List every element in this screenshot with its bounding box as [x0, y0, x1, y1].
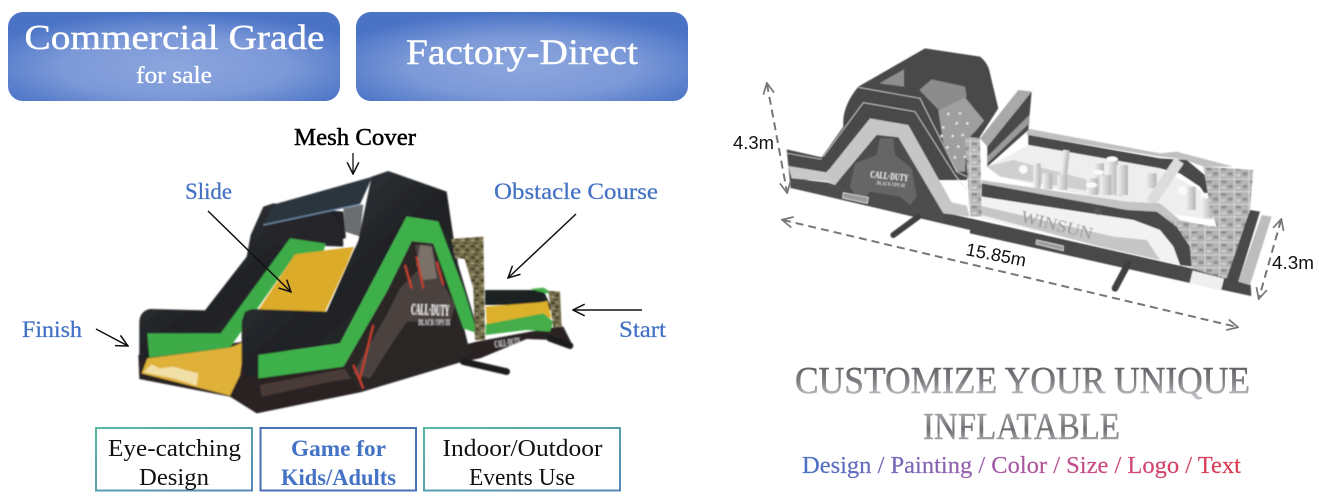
arrow: Start: [573, 309, 642, 311]
front black tube: [242, 171, 478, 378]
camo side block: [1213, 170, 1253, 278]
feature box: Game for Kids/Adults: Kids/Adults: [281, 465, 396, 490]
front gray band: [982, 206, 1160, 260]
dimension arrow: length: [783, 220, 1237, 327]
front green band: [258, 217, 477, 378]
label: Mesh Cover: Mesh Cover: [294, 125, 416, 151]
arrow: Obstacle Course: [508, 214, 576, 278]
registered mark: ®: [1094, 207, 1102, 218]
ground legs: [463, 338, 570, 372]
base tube: [138, 327, 573, 413]
camo pillar: [965, 137, 982, 217]
wall grips: [940, 112, 969, 159]
small sign: [843, 193, 868, 203]
light slide rim: [827, 118, 969, 217]
front white face: [982, 197, 1180, 265]
soldier panel: [343, 241, 470, 392]
feature box: Eye-catching Design: Eye-catching: [108, 436, 241, 462]
feature box: Indoor/Outdoor Events Use: Events Use: [469, 465, 575, 491]
feature box: Game for Kids/Adults: Game for: [291, 436, 386, 461]
rear wall dark band: [1028, 135, 1220, 208]
panel logo: [870, 169, 909, 189]
white gap: [343, 236, 358, 248]
mesh cover: [263, 172, 388, 224]
diagonal obstacle: [1151, 161, 1179, 203]
back arch inner: [263, 212, 343, 247]
badge: Factory-Direct: Factory-Direct: [406, 32, 638, 72]
base highlight: [260, 362, 397, 397]
climbing wall: [938, 97, 984, 172]
badge: Commercial Grade for sale: Commercial Grade: [24, 18, 324, 57]
back green band: [147, 238, 326, 358]
soldier panel: [791, 135, 943, 222]
base dark: [787, 149, 1260, 296]
front dark rail: [982, 183, 1193, 267]
dimension label: width: 4.3m: [1272, 253, 1314, 273]
badge: Commercial Grade for sale: for sale: [136, 63, 212, 89]
obstacle caps: [1019, 156, 1213, 198]
watermark: WINSUN: [1019, 207, 1095, 243]
feature box: Eye-catching Design: [96, 428, 252, 491]
red streaks: [353, 257, 443, 388]
heading: Customize your unique inflatable: INFLATABLE: [923, 406, 1120, 448]
camo arch: [452, 237, 485, 340]
mesh panel: [919, 79, 967, 111]
left light strip: [788, 166, 828, 182]
feature box: Indoor/Outdoor Events Use: [424, 428, 620, 491]
camo top block: [1203, 167, 1253, 227]
leg left: [893, 217, 918, 235]
leg right: [1115, 263, 1128, 288]
cross beam side: [987, 92, 1032, 167]
mesh triangle: [879, 69, 904, 87]
camo front block: [1168, 220, 1217, 275]
dimension label: length: 15.85m: [964, 239, 1028, 271]
sign: [1036, 240, 1063, 251]
panel logo: CALL·DUTY: [870, 169, 909, 184]
soldier figure: [353, 245, 455, 378]
rear wall top: [1027, 128, 1233, 167]
QR panel: [1190, 271, 1224, 291]
badge: Factory-Direct: [356, 12, 688, 101]
slide yellow: [258, 247, 354, 312]
right back section: [485, 288, 562, 335]
photo: inflatable obstacle course with slide: [138, 171, 573, 413]
subheading: customization options: Design / Painting / Color / Size / Logo / Text: [802, 453, 1241, 479]
label: Obstacle Course: Obstacle Course: [494, 179, 658, 204]
end platform: [1238, 215, 1272, 285]
panel logo: BLACK OPS III: [876, 180, 905, 189]
panel logo: BLACK OPS III: [418, 318, 450, 327]
back silhouette: [787, 48, 998, 180]
feature box: Eye-catching Design: Design: [139, 465, 209, 491]
back arch dark: [139, 203, 347, 359]
arrow: Slide: [208, 211, 291, 292]
arrow: Finish: [96, 329, 128, 346]
feature box: Indoor/Outdoor Events Use: Indoor/Outdoor: [442, 436, 602, 462]
landing yellow: [142, 342, 245, 396]
dimension arrow: height: [767, 84, 787, 192]
label: Finish: Finish: [22, 317, 83, 342]
photo: inflatable obstacle course with slide: CALL·DUTY: [411, 301, 450, 320]
outline lines: [787, 87, 967, 190]
feature box: Game for Kids/Adults: [260, 428, 416, 490]
cross beam top: [980, 90, 1032, 147]
panel logo: [411, 301, 450, 327]
label: Slide: Slide: [185, 179, 232, 204]
grayscale 3D model of the inflatable: [787, 48, 1272, 296]
heading: Customize your unique inflatable: CUSTOMIZE YOUR UNIQUE: [795, 360, 1250, 402]
heading: Customize your unique inflatable: [795, 360, 1250, 448]
badge: Commercial Grade for sale: [8, 12, 340, 101]
photo: inflatable obstacle course with slide: CALL·DUTY: [494, 336, 521, 351]
dimension arrow: width: [1259, 220, 1281, 298]
landing highlight: [143, 364, 198, 386]
soldier figure: [850, 138, 917, 205]
label: Start: Start: [619, 317, 667, 342]
play floor: [987, 145, 1213, 220]
arrow: Mesh Cover: [352, 153, 354, 174]
lower dark strip: [970, 218, 1251, 296]
dimension label: height: 4.3m: [733, 133, 774, 153]
front rim: [982, 180, 1217, 233]
obstacles: [1033, 150, 1213, 218]
